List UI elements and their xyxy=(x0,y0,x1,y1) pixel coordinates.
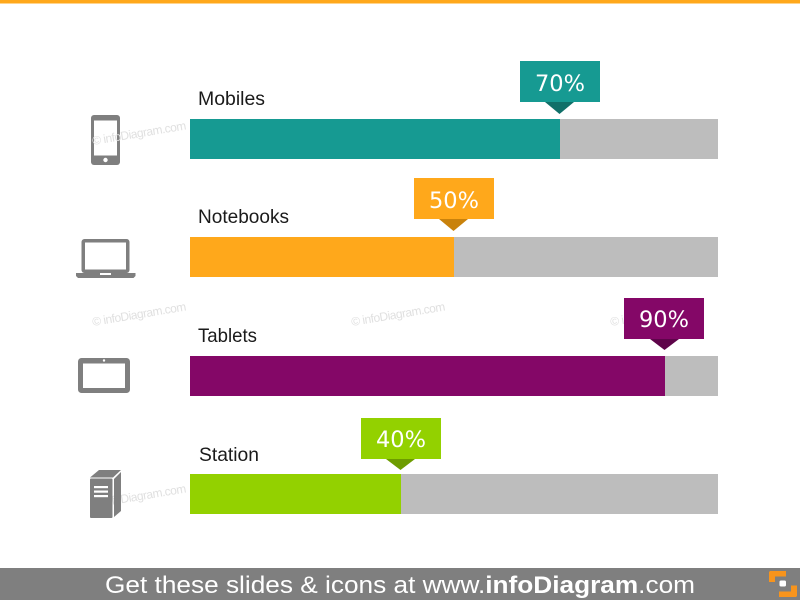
footer text: Get these slides & icons at www. infoDiagram .com xyxy=(105,572,695,599)
callout: 40% xyxy=(361,418,441,470)
callout: 70%: 70% xyxy=(535,71,585,97)
icon: mobile phone xyxy=(91,115,120,165)
watermarks behind icons: © infoDiagram.com xyxy=(91,299,187,329)
footer band xyxy=(0,568,800,600)
label: Tablets: Tablets xyxy=(198,325,257,347)
bar: Tablets 90% xyxy=(190,356,718,396)
label: Mobiles: Mobiles xyxy=(198,88,265,110)
callout: 90%: 90% xyxy=(639,307,689,333)
icon: workstation tower xyxy=(90,470,121,518)
icon: infoDiagram logo xyxy=(769,571,797,597)
bar: Station 40% xyxy=(190,474,718,514)
label: Notebooks: Notebooks xyxy=(198,206,289,228)
callout: 50% xyxy=(414,178,494,231)
callout: 90% xyxy=(624,298,704,350)
icon: tablet xyxy=(78,358,130,393)
watermarks behind icons: © infoDiagram.com xyxy=(350,299,446,329)
watermarks behind icons: © infoDiagram.com xyxy=(91,481,187,511)
callout: 50%: 50% xyxy=(429,188,479,214)
callout: 40%: 40% xyxy=(376,427,426,453)
watermark over phone: © infoDiagram.com xyxy=(91,118,187,148)
label: Station: Station xyxy=(199,444,259,466)
watermarks behind icons xyxy=(91,299,705,511)
callout: 70% xyxy=(520,61,600,114)
watermarks behind icons: © infoDiagram.com xyxy=(609,299,705,329)
top accent line xyxy=(0,0,800,4)
bar: Mobiles 70% xyxy=(190,119,718,159)
bar: Notebooks 50% xyxy=(190,237,718,277)
icon: notebook xyxy=(76,239,136,278)
